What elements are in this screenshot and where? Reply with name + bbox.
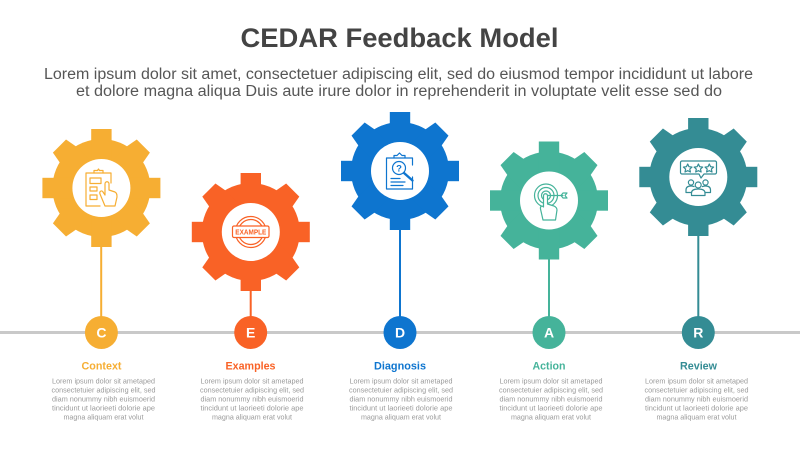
step: Action xyxy=(490,142,608,422)
description: magna aliquam erat volut xyxy=(361,414,441,422)
letter badge xyxy=(384,316,416,349)
description: consectetuier adipiscing elit, sed xyxy=(644,388,749,394)
icon: target with hand xyxy=(534,184,567,220)
step: Review xyxy=(639,118,757,422)
step: Action: A xyxy=(544,324,554,340)
icon: clipboard with magnifier: ? xyxy=(396,164,402,174)
description: tincidunt ut laorieeti dolorie ape xyxy=(645,406,748,412)
subtitle text: et dolore magna aliqua Duis aute irure dolor in reprehenderit in voluptate velit esse sed do xyxy=(76,83,722,100)
description: Lorem ipsum dolor sit ametaped xyxy=(52,378,155,386)
description xyxy=(200,378,304,422)
step: Diagnosis: D xyxy=(395,324,405,340)
icon: clipboard with magnifier xyxy=(386,153,412,189)
description: consectetuier adipiscing elit, sed xyxy=(52,388,156,394)
gear xyxy=(42,129,160,247)
description: consectetuier adipiscing elit, sed xyxy=(200,388,304,394)
connector stem xyxy=(399,228,401,320)
description: Lorem ipsum dolor sit ametaped xyxy=(200,378,304,386)
heading: Examples xyxy=(226,360,276,372)
heading: Context xyxy=(82,360,122,372)
timeline line xyxy=(0,331,800,334)
connector stem xyxy=(697,234,699,320)
description xyxy=(644,378,749,422)
step: Examples xyxy=(192,173,310,422)
description xyxy=(349,378,453,422)
step: Context: C xyxy=(96,324,106,340)
step: Review: R xyxy=(693,324,703,340)
description: tincidunt ut laorieeti dolorie ape xyxy=(500,406,603,412)
description: Lorem ipsum dolor sit ametaped xyxy=(500,378,603,386)
description: tincidunt ut laorieeti dolorie ape xyxy=(200,406,304,412)
description: magna aliquam erat volut xyxy=(511,414,591,422)
connector stem xyxy=(250,289,252,320)
letter badge xyxy=(234,316,267,349)
icon: example stamp: EXAMPLE xyxy=(235,228,266,237)
icon: clipboard with hand xyxy=(86,169,117,206)
heading: Review xyxy=(680,360,717,372)
title: CEDAR Feedback Model xyxy=(240,23,558,53)
description: tincidunt ut laorieeti dolorie ape xyxy=(52,406,155,412)
gear xyxy=(639,118,757,236)
gear xyxy=(341,112,459,230)
description: diam nonummy nibh euismoerid xyxy=(52,396,155,404)
description: diam nonummy nibh euismoerid xyxy=(500,396,603,404)
subtitle text xyxy=(44,66,753,100)
description xyxy=(499,378,603,422)
connector stem xyxy=(548,258,550,320)
step: Examples: E xyxy=(246,324,255,340)
gear xyxy=(192,173,310,291)
subtitle text: Lorem ipsum dolor sit amet, consectetuer adipiscing elit, sed do eiusmod tempor incididunt ut labore xyxy=(44,66,753,83)
heading: Diagnosis xyxy=(374,360,426,372)
letter badge xyxy=(85,316,118,349)
step: Context xyxy=(42,129,160,422)
description: Lorem ipsum dolor sit ametaped xyxy=(350,378,453,386)
icon: example stamp xyxy=(232,216,269,248)
description: magna aliquam erat volut xyxy=(656,414,737,422)
description: diam nonummy nibh euismoerid xyxy=(645,396,748,404)
step: Diagnosis xyxy=(341,112,459,422)
letter badge xyxy=(532,316,566,349)
icon: star rating and people xyxy=(680,161,716,196)
connector stem xyxy=(100,245,102,320)
description: diam nonummy nibh euismoerid xyxy=(200,396,304,404)
description: Lorem ipsum dolor sit ametaped xyxy=(645,378,748,386)
description: magna aliquam erat volut xyxy=(212,414,292,422)
description: tincidunt ut laorieeti dolorie ape xyxy=(350,406,453,412)
heading: Action xyxy=(532,360,566,372)
letter badge xyxy=(682,316,715,349)
description: consectetuier adipiscing elit, sed xyxy=(499,388,603,394)
gear xyxy=(490,142,608,260)
description xyxy=(52,378,156,422)
description: diam nonummy nibh euismoerid xyxy=(350,396,453,404)
description: magna aliquam erat volut xyxy=(64,414,144,422)
description: consectetuier adipiscing elit, sed xyxy=(349,388,453,394)
